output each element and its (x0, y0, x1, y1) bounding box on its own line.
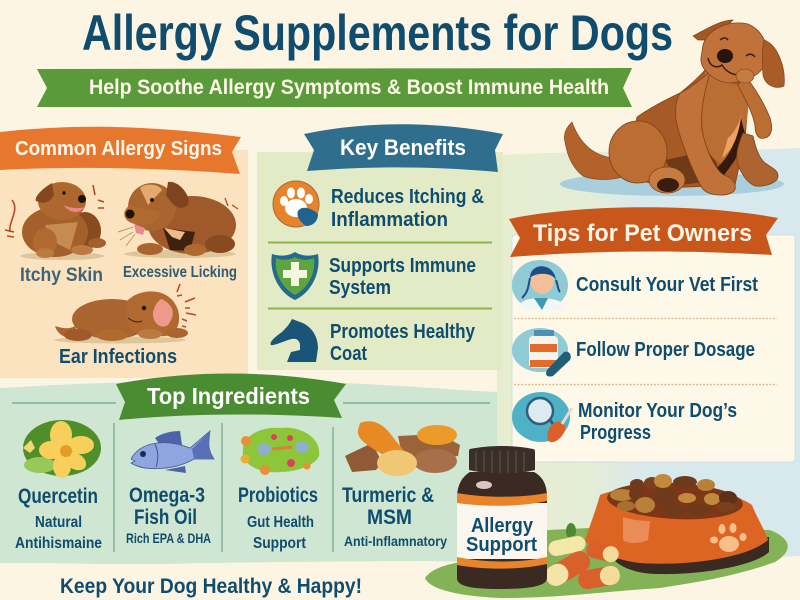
text: quercetin: Natural (35, 514, 82, 531)
footer slogan: Keep Your Dog Healthy & Happy! (60, 575, 362, 598)
text: monitor: Progress (580, 422, 651, 444)
illustration: food bowl (585, 474, 769, 574)
text: supports immune: Supports Immune (329, 255, 476, 277)
icon: dog head silhouette (271, 319, 318, 362)
title: Allergy Supplements for Dogs (82, 5, 673, 61)
subtitle banner (37, 68, 632, 107)
text: omega-3: Omega-3 (129, 484, 205, 507)
text: omega-3 (126, 484, 211, 546)
ribbon: tips: Tips for Pet Owners (533, 220, 752, 247)
text: quercetin (15, 485, 102, 552)
label: excessive licking: Excessive Licking (123, 264, 237, 281)
illustration: ear infection dog (54, 284, 196, 344)
text: omega-3: Fish Oil (134, 506, 197, 529)
panel: common allergy signs (0, 127, 248, 378)
illustration: scratching dog (560, 20, 784, 196)
text: probiotics: Probiotics (238, 484, 318, 507)
text: probiotics: Support (253, 535, 307, 552)
text: monitor: Monitor Your Dog’s (578, 400, 737, 422)
text: quercetin: Antihismaine (15, 535, 102, 552)
ribbon: top ingredients: Top Ingredients (147, 383, 310, 409)
text: turmeric and msm: Turmeric & (342, 484, 434, 507)
text: reduces itching: Inflammation (331, 209, 448, 231)
grass patch (425, 528, 788, 598)
text: supports immune (329, 255, 476, 299)
subtitle banner: Help Soothe Allergy Symptoms & Boost Immune Health (89, 76, 609, 99)
text: turmeric and msm: MSM (367, 506, 412, 529)
icon: paw with hand (273, 181, 319, 227)
bottle label text (466, 515, 537, 556)
text: monitor (578, 400, 737, 444)
label: itchy skin: Itchy Skin (20, 265, 103, 286)
text: supports immune: System (329, 277, 391, 299)
illustration: licking dog (118, 182, 238, 258)
icon: quercetin flower (23, 420, 101, 478)
text: promotes healthy coat (330, 321, 476, 365)
illustration: capsules (542, 523, 621, 590)
text: probiotics: Gut Health (247, 514, 314, 531)
ribbon: tips (509, 207, 778, 257)
ribbon: common allergy signs (0, 127, 241, 174)
icon: magnifier (512, 392, 572, 442)
ribbon: common allergy signs: Common Allergy Signs (15, 138, 222, 160)
icon: fish (131, 431, 214, 473)
text: promotes healthy coat: Coat (330, 343, 367, 365)
icon: turmeric roots (345, 421, 460, 476)
ribbon: top ingredients (116, 374, 346, 420)
icon: pill bottle (512, 328, 571, 377)
ribbon: key benefits (304, 124, 503, 172)
bottle label text: Support (466, 534, 537, 556)
text: promotes healthy coat: Promotes Healthy (330, 321, 476, 343)
text: probiotics (238, 484, 318, 552)
icon: paw on bowl (710, 523, 746, 552)
text: consult: Consult Your Vet First (576, 274, 758, 296)
icon: vet (512, 260, 568, 310)
panel: top ingredients (0, 374, 497, 564)
text: turmeric and msm: Anti-Inflamnatory (344, 533, 447, 549)
text: turmeric and msm (342, 484, 447, 549)
text: quercetin: Quercetin (18, 485, 98, 508)
icon: probiotics (240, 428, 319, 475)
icon: shield (271, 252, 319, 300)
illustration: supplement bottle (457, 446, 547, 589)
ribbon: key benefits: Key Benefits (340, 135, 466, 160)
panel: tips for pet owners (509, 207, 795, 462)
bottle label text: Allergy (471, 515, 534, 537)
panel: key benefits (257, 124, 503, 370)
text: omega-3: Rich EPA & DHA (126, 530, 211, 546)
illustration: itchy dog (5, 182, 106, 260)
kibble (610, 474, 737, 515)
label: ear infections: Ear Infections (59, 346, 177, 368)
text: reduces itching: Reduces Itching & (331, 186, 484, 208)
text: reduces itching (331, 186, 484, 231)
text: dosage: Follow Proper Dosage (576, 339, 755, 361)
